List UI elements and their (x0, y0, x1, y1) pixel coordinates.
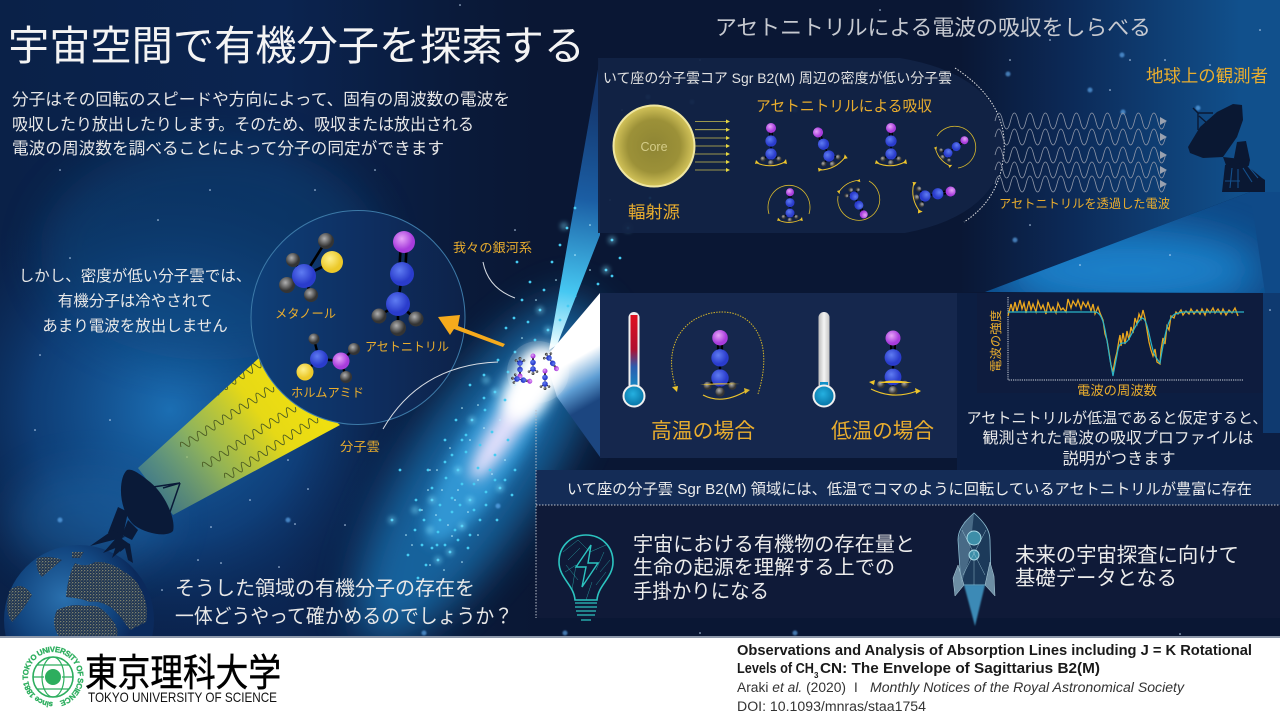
text: question: そうした領域の有機分子の存在を (175, 578, 475, 600)
intro paragraph: 吸収したり放出したりします。そのため、吸収または放出される (12, 115, 474, 134)
rotating molecules (755, 123, 976, 223)
right heading: アセトニトリルによる電波の吸収をしらべる (715, 16, 1151, 40)
text: implication two: 基礎データとなる (1015, 567, 1177, 590)
citation: Levels of CH (737, 661, 814, 677)
molecule: formamide (296, 334, 360, 383)
icon: core: Core (640, 140, 668, 154)
panel: temperature comparison (600, 293, 957, 458)
text: low-density clouds (19, 267, 251, 335)
molecule: acetonitrile (372, 231, 424, 336)
icon: rocket (953, 513, 995, 626)
text: low-density clouds: あまり電波を放出しません (42, 317, 228, 335)
text: chart explanation: 説明がつきます (1062, 450, 1176, 468)
x axis label: 電波の周波数 (1077, 383, 1157, 398)
logo: university name: TOKYO UNIVERSITY OF SCIENCE (88, 689, 277, 705)
intro paragraph: 分子はその回転のスピードや方向によって、固有の周波数の電波を (12, 90, 510, 109)
citation: I (854, 680, 858, 695)
panel: implications (536, 410, 1280, 626)
text: implication one: 手掛かりになる (633, 580, 769, 603)
citation: DOI: 10.1093/mnras/staa1754 (737, 699, 927, 714)
text: question (175, 578, 513, 628)
dark beam towards the observer (540, 0, 1280, 292)
logo: university name: 東京理科大学 (85, 653, 281, 695)
text: chart explanation: 観測された電波の吸収プロファイルは (982, 429, 1254, 447)
citation: Araki et al. (2020) (737, 680, 846, 695)
label: acetonitrile: アセトニトリル (365, 340, 449, 354)
citation (737, 643, 1252, 714)
label: our galaxy: 我々の銀河系 (453, 241, 532, 255)
hot molecule (672, 312, 764, 399)
cold molecule (869, 330, 921, 395)
icon: cold thermometer (814, 312, 834, 406)
text: implication one: 宇宙における有機物の存在量と (633, 533, 915, 556)
text: panel heading: いて座の分子雲コア Sgr B2(M) 周辺の密度が低い分子雲 (603, 70, 952, 86)
title: 宇宙空間で有機分子を探索する (8, 23, 585, 69)
text: absorption heading: アセトニトリルによる吸収 (756, 98, 932, 115)
molecule: methanol (279, 233, 343, 302)
label: transmitted waves: アセトニトリルを透過した電波 (999, 197, 1170, 211)
earth (4, 545, 154, 695)
panel: top absorption panel (598, 58, 1005, 233)
footer (0, 636, 1280, 719)
transmitted radio waves (995, 113, 1167, 192)
intro paragraph: 電波の周波数を調べることによって分子の同定ができます (12, 139, 444, 158)
dotted boundary (955, 68, 1004, 222)
label: our galaxy (453, 241, 532, 298)
label: methanol: メタノール (275, 307, 336, 321)
text: implication two: 未来の宇宙探査に向けて (1015, 544, 1239, 567)
text: implication one (633, 533, 915, 603)
text: low-density clouds: 有機分子は冷やされて (58, 292, 212, 310)
text: implication one: 生命の起源を理解する上での (633, 556, 895, 579)
icon: observer telescope (1188, 104, 1265, 192)
citation: Observations and Analysis of Absorption Lines including J = K Rotational (737, 643, 1252, 659)
icon: radio telescope on earth (90, 470, 180, 563)
text: implication two (1015, 544, 1239, 590)
label: formamide: ホルムアミド (291, 386, 364, 400)
citation: Monthly Notices of the Royal Astronomical Society (870, 680, 1185, 695)
text: question: 一体どうやって確かめるのでしょうか？ (175, 606, 513, 628)
chart: absorption profile (977, 293, 1263, 398)
panel: molecules circle (251, 210, 465, 424)
banner: conclusion: いて座の分子雲 Sgr B2(M) 領域には、低温でコマのように回転しているアセトニトリルが豊富に存在 (567, 481, 1252, 498)
galaxy with star cloud (314, 58, 650, 674)
molecules at galactic centre (507, 341, 569, 403)
model fit (1008, 312, 1244, 376)
citation: 3 (814, 671, 819, 680)
yellow radio beam (138, 349, 340, 515)
icon: light bulb (559, 535, 613, 620)
label: molecular cloud: 分子雲 (340, 440, 380, 454)
arrows from core (695, 120, 730, 172)
label: observer on earth: 地球上の観測者 (1146, 66, 1268, 86)
arrow: from galaxy to molecules (438, 315, 505, 347)
label: radiation source: 輻射源 (628, 203, 680, 222)
banner: conclusion (536, 470, 1280, 505)
observed spectrum (1008, 299, 1238, 372)
text: chart explanation: アセトニトリルが低温であると仮定すると、 (966, 410, 1268, 427)
blue glow below beam (957, 192, 1280, 470)
icon: core (614, 106, 694, 186)
label: high temperature: 高温の場合 (651, 420, 755, 443)
text: low-density clouds: しかし、密度が低い分子雲では、 (19, 267, 251, 285)
label: molecular cloud (340, 362, 498, 454)
citation: CN: The Envelope of Sagittarius B2(M) (820, 661, 1100, 677)
label: low temperature: 低温の場合 (831, 420, 934, 443)
y axis label: 電波の強度 (989, 310, 1003, 372)
text: chart explanation (966, 410, 1268, 468)
icon: hot thermometer (624, 312, 644, 406)
logo: university crest: since 1881 TOKYO UNIVERSITY OF SCIENCE (22, 646, 84, 708)
intro paragraph (12, 90, 510, 158)
